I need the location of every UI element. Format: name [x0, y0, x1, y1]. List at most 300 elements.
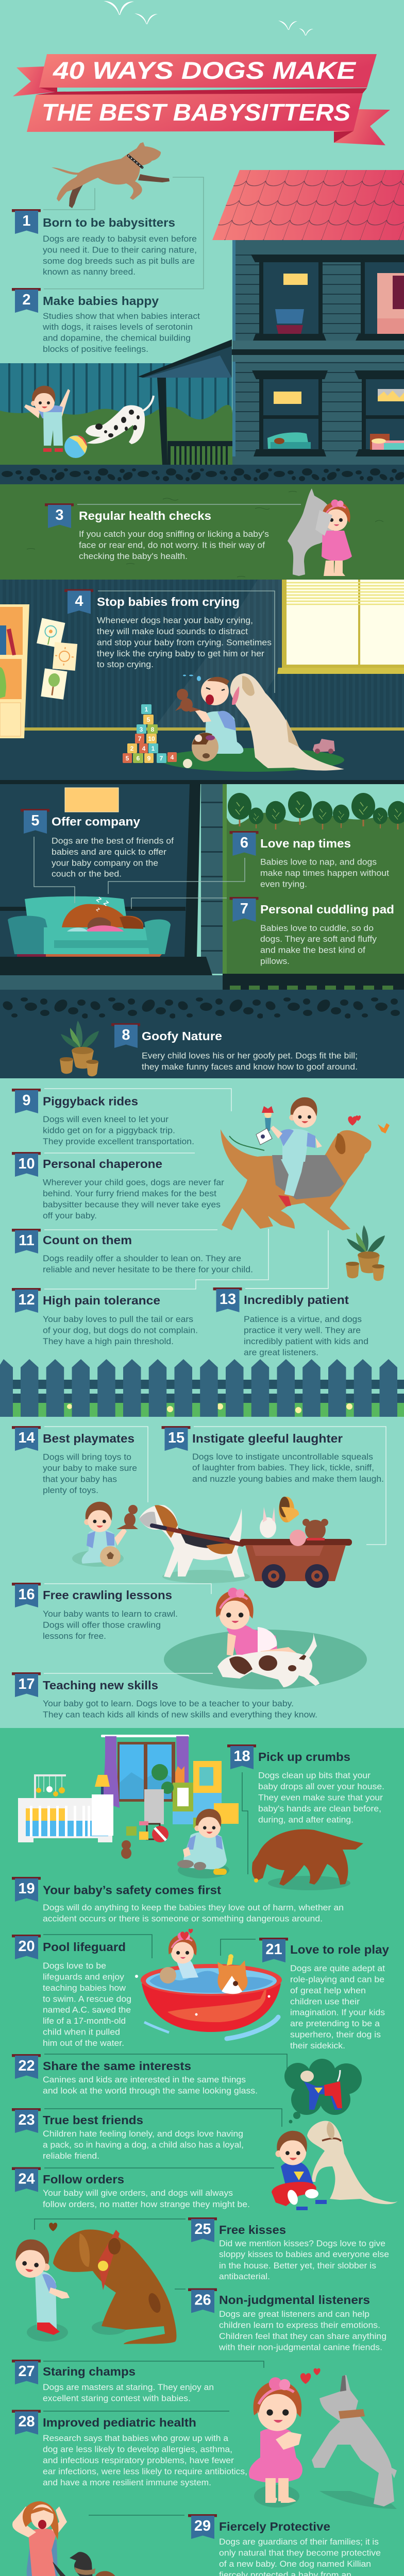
item 24 [12, 2167, 274, 2209]
description 17: They can teach kids all kinds of new skills and everything they know. [43, 1709, 317, 1720]
description 9: kiddo get on for a piggyback trip. [43, 1126, 175, 1136]
badge 26 [188, 2289, 217, 2313]
item 21 [221, 1938, 389, 2050]
description 21: role-playing and can be [290, 1974, 384, 1984]
description 29: only natural that they become protective [219, 2548, 381, 2557]
badge 7: 7 [240, 901, 248, 917]
heading 17: Teaching new skills [43, 1679, 158, 1692]
description 18: baby's hands are clean before, [258, 1804, 381, 1814]
badge 5: 5 [31, 812, 40, 829]
item 13 [213, 1287, 368, 1357]
badge 29: 29 [194, 2518, 211, 2534]
description 1: you need it. Due to their caring nature, [43, 245, 197, 255]
description 26: children learn to express their emotions. [219, 2320, 380, 2330]
title text line 2: THE BEST BABYSITTERS [42, 99, 350, 126]
number blocks: 1 [145, 706, 148, 713]
badge 6: 6 [240, 835, 248, 851]
description 21: superhero, their dog is [290, 2030, 381, 2040]
kids drawings on wall [37, 618, 77, 700]
item 22 [12, 2054, 287, 2096]
badge 5 [21, 809, 49, 834]
badge 12 [12, 1288, 41, 1313]
badge 2: 2 [22, 292, 31, 308]
dog [230, 673, 344, 771]
badge 25: 25 [194, 2221, 211, 2238]
description 27: excellent staring contest with babies. [43, 2394, 191, 2403]
description 10: babysitter because they will never take eyes [43, 1199, 221, 1210]
description 10: off your baby. [43, 1211, 97, 1221]
heading 3: Regular health checks [79, 509, 211, 522]
badge 28 [12, 2410, 41, 2435]
illustration: nursery room [18, 1735, 239, 1878]
number blocks: 7 [138, 735, 142, 742]
description 29 [219, 2537, 381, 2576]
item 14 [12, 1426, 148, 1502]
description 16: Your baby wants to learn to crawl. [43, 1609, 178, 1619]
badge 21: 21 [265, 1941, 282, 1958]
window items: pictures [274, 274, 404, 404]
heading 18: Pick up crumbs [258, 1750, 350, 1764]
heading 1: Born to be babysitters [43, 216, 175, 229]
panel: living room [0, 784, 223, 990]
illustration: sofa with napping dog and baby [8, 895, 171, 957]
illustration: running pit bull [52, 142, 170, 208]
badge 9 [12, 1089, 41, 1113]
badge 22: 22 [18, 2058, 35, 2074]
description 17 [43, 1699, 317, 1720]
description 24: Your baby will give orders, and dogs will always [43, 2188, 233, 2198]
window and curtains [100, 1735, 189, 1808]
description 27: Dogs are masters at staring. They enjoy an [43, 2382, 214, 2392]
heading 2: Make babies happy [43, 294, 159, 308]
description 10: Wherever your child goes, dogs are never far [43, 1178, 224, 1188]
item 17 [12, 1672, 317, 1720]
description 15: Dogs love to instigate uncontrollable squeals [192, 1452, 373, 1462]
heading 8: Goofy Nature [142, 1029, 222, 1043]
wagon [152, 1526, 352, 1588]
description 4: and stop your baby from crying. Sometimes [97, 637, 272, 647]
description 13: are great listeners. [244, 1348, 318, 1357]
item 3 [45, 503, 301, 561]
item 1 [12, 177, 204, 289]
description 5: Dogs are the best of friends of [52, 836, 174, 845]
item 16 [12, 1583, 211, 1641]
description 28: dog are less likely to develop allergies, asthma, [43, 2444, 232, 2454]
description 1: known as nanny breed. [43, 267, 136, 277]
baby [193, 677, 243, 754]
badge 14 [12, 1426, 41, 1451]
description 15: and nuzzle young babies and make them laugh. [192, 1474, 384, 1484]
badge 18: 18 [233, 1748, 250, 1765]
description 21: children use their [290, 1996, 360, 2006]
description 13 [244, 1314, 368, 1357]
description 25: Did we mention kisses? Dogs love to give [219, 2239, 385, 2248]
description 6 [260, 857, 389, 889]
stones band 2 and goofy panel [0, 990, 404, 1078]
description 4: to stop crying. [97, 659, 154, 669]
badge 8: 8 [122, 1027, 130, 1043]
number blocks: 1 [152, 745, 155, 752]
badge 1: 1 [22, 213, 31, 229]
description 2: Studies show that when babies interact [43, 311, 200, 321]
description 15 [192, 1452, 384, 1484]
heading 10: Personal chaperone [43, 1157, 162, 1171]
item 26 [175, 2289, 386, 2352]
description 19 [43, 1903, 344, 1924]
item 19 [12, 1877, 344, 1924]
description 18: They even make sure that your [258, 1793, 383, 1802]
description 7: Babies love to cuddle, so do [260, 923, 374, 933]
badge 17 [12, 1672, 41, 1697]
illustration: dalmatian and ball [64, 396, 154, 458]
description 16 [43, 1609, 178, 1641]
picture [65, 788, 119, 812]
description 19: Dogs will do anything to keep the babies they love out of harm, whether an [43, 1903, 344, 1912]
lamp [95, 1775, 110, 1794]
icon: potted plant [60, 1021, 99, 1076]
description 24: follow orders, no matter how strange they might be. [43, 2199, 250, 2209]
item 23 [12, 2108, 282, 2161]
title text: 40 WAYS DOGS MAKE [53, 57, 357, 84]
heading 7: Personal cuddling pad [260, 903, 394, 916]
number blocks: 5 [147, 716, 150, 723]
description 23: a pack, so in having a dog, a child also has a loyal, [43, 2140, 244, 2150]
heading 23: True best friends [43, 2113, 143, 2127]
description 11: reliable and never hesitate to be there for your child. [43, 1264, 253, 1275]
illustration: red setter sniffing crumbs [252, 1829, 363, 1890]
item 11 [12, 1229, 328, 1289]
description 3: face or rear end, do not worry. It is their way of [79, 540, 265, 550]
badge 13 [213, 1287, 242, 1312]
description 7: dogs. They are soft and fluffy [260, 934, 377, 944]
description 7: pillows. [260, 956, 290, 966]
description 12: of your dog, but dogs do not complain. [43, 1325, 198, 1335]
sleep letters [95, 895, 110, 912]
number blocks: 10 [148, 735, 155, 742]
description 14: that your baby has [43, 1475, 117, 1484]
badge 2 [12, 288, 41, 313]
description 21 [290, 1963, 385, 2050]
number blocks: 9 [147, 755, 151, 762]
description 6: even trying. [260, 879, 307, 889]
heading 13: Incredibly patient [244, 1293, 349, 1307]
description 18 [258, 1771, 384, 1824]
house: roof [212, 170, 404, 240]
badge 13: 13 [220, 1291, 236, 1308]
thought cloud: super dog [284, 2059, 362, 2124]
description 20: to swim. A rescue dog [43, 1994, 131, 2004]
teddy [175, 689, 201, 712]
item 5 [21, 809, 174, 903]
item 4 [64, 589, 275, 693]
description 8: they make funny faces and know how to goof around. [142, 1062, 358, 1072]
badge 12: 12 [18, 1292, 35, 1308]
shelves and toys [126, 1761, 239, 1842]
heading 11: Count on them [43, 1233, 132, 1247]
description 9: They provide excellent transportation. [43, 1137, 194, 1146]
description 20: Dogs love to be [43, 1961, 106, 1971]
description 26 [218, 2309, 386, 2352]
toy car [313, 739, 335, 754]
illustration: schnauzer licking girl [288, 488, 352, 576]
badge 11: 11 [19, 1232, 35, 1249]
description 21: Dogs are quite adept at [290, 1963, 385, 1973]
description 2: with dogs, it raises levels of serotonin [42, 322, 193, 332]
description 7 [260, 923, 377, 966]
badge 22 [12, 2054, 41, 2079]
mom [12, 2501, 67, 2576]
baby sitting [177, 1809, 229, 1878]
description 26: Children feel that they can share anything [219, 2331, 386, 2341]
tears [183, 675, 201, 681]
badge 4: 4 [75, 593, 83, 609]
description 1: Dogs are ready to babysit even before [43, 234, 197, 244]
heading 21: Love to role play [290, 1943, 389, 1956]
illustration: baby, beagle and toy wagon [72, 1497, 352, 1588]
description 14 [43, 1452, 137, 1495]
description 16: Dogs will offer those crawling [43, 1620, 161, 1630]
badge 8 [111, 1023, 140, 1048]
heading 14: Best playmates [43, 1432, 134, 1445]
description 20: life of a 17-month-old [43, 2016, 126, 2026]
number blocks [123, 704, 177, 763]
description 20: lifeguards and enjoy [43, 1972, 125, 1981]
badge 15: 15 [168, 1430, 184, 1446]
description 8 [142, 1051, 358, 1072]
heading 16: Free crawling lessons [43, 1588, 172, 1602]
panel: green section [0, 1728, 404, 2576]
jester toy [256, 1106, 274, 1145]
heading 25: Free kisses [219, 2223, 286, 2236]
heading 9: Piggyback rides [43, 1095, 138, 1108]
badge 3 [45, 503, 74, 528]
description 11: Dogs readily offer a shoulder to lean on. They are [43, 1253, 241, 1263]
number blocks: 4 [142, 745, 146, 752]
window items: chair and wardrobe [275, 273, 404, 334]
heading 26: Non-judgmental listeners [219, 2293, 370, 2307]
item 27 [12, 2360, 264, 2403]
bookshelf [0, 604, 29, 738]
number blocks: 2 [130, 745, 134, 752]
teddy [116, 1505, 138, 1529]
badge 14: 14 [18, 1430, 35, 1446]
heading 15: Instigate gleeful laughter [192, 1432, 343, 1445]
badge 9: 9 [22, 1092, 31, 1109]
description 20: child when it pulled [43, 2027, 120, 2037]
description 15: of laughter from babies. They lick, tickle, sniff, [192, 1463, 374, 1472]
backyard grass [0, 405, 232, 465]
description 12: Your baby loves to pull the tail or ears [43, 1314, 193, 1324]
item 29 [89, 2514, 381, 2576]
dog [53, 2552, 139, 2576]
badge 10: 10 [18, 1156, 35, 1172]
description 28: and have a more resilient immune system. [43, 2478, 211, 2487]
heading 20: Pool lifeguard [43, 1940, 126, 1954]
number blocks: 5 [126, 755, 129, 762]
description 5: your baby company on the [52, 858, 158, 868]
heading 29: Fiercely Protective [219, 2520, 330, 2533]
beagle [139, 1505, 250, 1583]
description 5: babies and are quick to offer [52, 847, 166, 857]
picket fence [0, 1359, 404, 1417]
heading 27: Staring champs [43, 2365, 136, 2378]
badge 24: 24 [18, 2171, 35, 2188]
heading 4: Stop babies from crying [97, 595, 240, 608]
badge 26: 26 [194, 2292, 211, 2308]
description 9: Dogs will even kneel to let your [43, 1114, 169, 1124]
description 4: they lick the crying baby to get him or her [97, 649, 264, 658]
description 26: with their non-judgmental canine friends. [218, 2342, 382, 2352]
badge 28: 28 [18, 2413, 35, 2430]
description 22: Canines and kids are interested in the same things [43, 2075, 246, 2084]
illustration: baby playing with ball [24, 386, 70, 452]
badge 19 [12, 1877, 41, 1902]
description 3 [79, 529, 269, 561]
baby [72, 1502, 127, 1567]
description 18: baby drops all over your house. [258, 1782, 384, 1791]
description 18: Dogs clean up bits that your [258, 1771, 371, 1781]
panel: nursery room [0, 580, 404, 784]
illustration: boy kissing big brown dog [13, 2223, 176, 2344]
heading 24: Follow orders [43, 2173, 124, 2186]
item 12 [12, 1288, 198, 1346]
porch [138, 340, 232, 465]
description 22: and look at the world through the same looking glass. [43, 2086, 258, 2096]
crib [18, 1774, 113, 1842]
description 7: and make the best kind of [260, 945, 365, 955]
badge 4 [64, 589, 93, 614]
description 21: their sidekick. [290, 2041, 345, 2050]
badge 25 [188, 2217, 217, 2242]
description 21: are pretending to be a [290, 2019, 380, 2028]
description 10: behind. Your furry friend makes for the best [43, 1189, 216, 1198]
description 5 [52, 836, 174, 879]
badge 21 [259, 1938, 288, 1962]
description 28: Research says that babies who grow up with a [43, 2433, 229, 2443]
description 18: during, and after eating. [258, 1815, 354, 1824]
description 24 [43, 2188, 250, 2209]
illustration: girl crawling with puppy [164, 1588, 367, 1689]
window items: bed [370, 434, 404, 450]
birds [104, 1, 313, 36]
teddy [121, 1840, 131, 1859]
description 2: and dopamine, the chemical building [43, 333, 191, 343]
rug [161, 748, 344, 772]
badge 20: 20 [18, 1938, 35, 1955]
badge 16: 16 [18, 1586, 35, 1603]
description 12: They have a high pain threshold. [43, 1336, 174, 1346]
number blocks: 6 [137, 755, 140, 762]
description 29: Dogs are guardians of their families; it is [219, 2537, 379, 2547]
item 2 [12, 288, 200, 354]
icon: potted plant 2 [346, 1225, 385, 1281]
item 7 [131, 897, 394, 966]
item 28 [12, 2410, 247, 2487]
heading 22: Share the same interests [43, 2059, 191, 2073]
number blocks: 3 [140, 726, 143, 733]
number blocks: 7 [160, 755, 163, 762]
description 11 [43, 1253, 253, 1275]
badge 17: 17 [18, 1676, 35, 1692]
badge 16 [12, 1583, 41, 1607]
badge 11 [12, 1229, 41, 1253]
description 4 [97, 616, 272, 669]
badge 15 [162, 1426, 191, 1451]
illustration: protective black dog with mom and baby [12, 2501, 160, 2576]
description 3: If you catch your dog sniffing or licking a baby's [79, 529, 269, 539]
description 3: checking the baby's health. [79, 551, 188, 561]
badge 6 [230, 831, 259, 856]
sleep letters: Z [95, 907, 101, 912]
backyard fence [0, 340, 232, 465]
description 20: him out of the water. [43, 2038, 124, 2048]
item 18 [227, 1744, 384, 1874]
description 19: accident occurs or there is someone or something dangerous around. [43, 1913, 323, 1924]
description 22 [43, 2075, 258, 2096]
description 21: imagination. If your kids [290, 2008, 385, 2018]
badge 3: 3 [55, 507, 64, 523]
description 20 [43, 1961, 131, 2048]
description 25 [219, 2239, 389, 2281]
description 13: practice it very well. They are [244, 1325, 361, 1335]
sleep letters: Z [95, 895, 103, 904]
title ribbon [13, 54, 390, 145]
illustration: paddling pool with baby and corgi [135, 1929, 282, 2039]
heading 12: High pain tolerance [43, 1294, 160, 1307]
badge 1 [12, 209, 41, 234]
description 23 [43, 2129, 244, 2161]
description 5: couch or the bed. [52, 869, 122, 879]
illustration: boy riding golden retriever [221, 1097, 390, 1230]
heading 19: Your baby’s safety comes first [43, 1884, 221, 1897]
badge 18 [227, 1744, 256, 1769]
description 28: ear infections, were less likely to require antibiotics, [43, 2466, 247, 2476]
heading 5: Offer company [52, 815, 140, 828]
badge 23: 23 [18, 2112, 35, 2128]
description 21: of great help when [290, 1986, 366, 1995]
illustration: superhero boy and dog [272, 2121, 398, 2210]
toys [260, 1497, 328, 1546]
description 20: named A.C. saved the [43, 2005, 131, 2015]
baby [82, 2571, 129, 2576]
sleep letters: Z [102, 899, 110, 907]
badge 19: 19 [18, 1880, 35, 1897]
description 12 [43, 1314, 198, 1346]
description 27 [43, 2382, 214, 2403]
badge 27 [12, 2360, 41, 2384]
description 9 [43, 1114, 194, 1146]
badge 23 [12, 2108, 41, 2133]
stones band 1 [0, 465, 404, 484]
number blocks: 8 [151, 726, 155, 733]
description 13: Patience is a virtue, and dogs [244, 1314, 362, 1324]
badge 29 [188, 2514, 217, 2539]
description 13: incredibly patient with kids and [244, 1336, 368, 1346]
description 6: Babies love to nap, and dogs [260, 857, 377, 867]
description 4: Whenever dogs hear your baby crying, [97, 616, 253, 625]
panel: lawn [0, 484, 404, 580]
description 25: sloppy kisses to babies and everyone else [219, 2249, 389, 2259]
description 14: plenty of toys. [43, 1485, 98, 1495]
description 8: Every child loves his or her goofy pet. Dogs fit the bill; [142, 1051, 358, 1060]
window with blinds [277, 580, 404, 674]
badge 24 [12, 2167, 41, 2192]
description 26: Dogs are great listeners and can help [219, 2309, 369, 2319]
description 6: make nap times happen without [260, 868, 389, 878]
illustration: crying baby, dog, blocks and toys [123, 673, 344, 772]
description 14: Dogs will bring toys to [43, 1452, 131, 1462]
panel: teal section [0, 1078, 404, 1728]
